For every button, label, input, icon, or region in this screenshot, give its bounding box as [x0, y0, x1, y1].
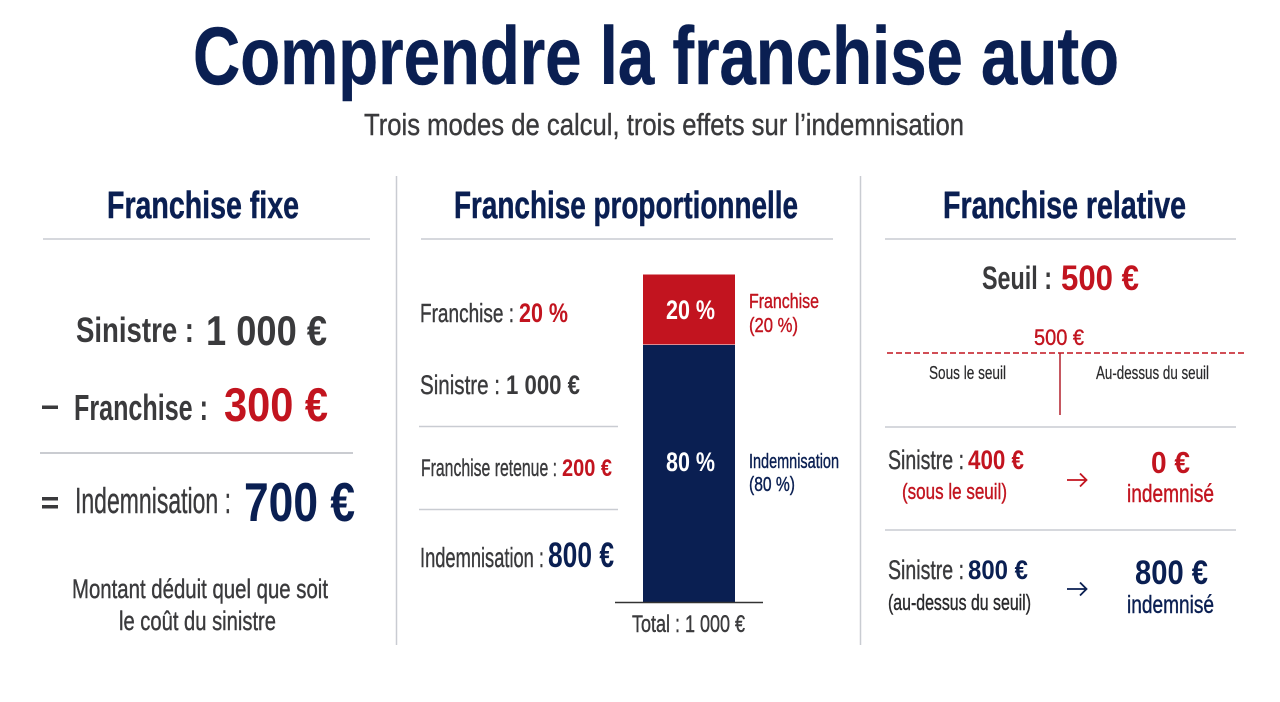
case: above threshold: (au-dessus du seuil) [888, 590, 1031, 615]
panel: franchise relative [885, 185, 1246, 619]
heading: franchise relative: Franchise relative [943, 185, 1186, 227]
panel: franchise fixe [40, 185, 370, 636]
left list: Indemnisation : [420, 542, 544, 573]
line: franchise: Franchise : [74, 387, 208, 428]
left list: Franchise retenue : [421, 455, 557, 482]
line: sinistre: Sinistre : [76, 311, 194, 350]
case: below threshold: 0 € [1151, 445, 1190, 480]
line: franchise: 300 € [224, 378, 328, 431]
threshold diagram: Sous le seuil [929, 363, 1006, 383]
legend: franchise [749, 291, 819, 337]
line: franchise [42, 378, 328, 431]
heading: franchise proportionnelle: Franchise proportionnelle [454, 185, 798, 227]
threshold diagram: 500 € [1034, 325, 1084, 350]
left list: Franchise : [420, 298, 514, 328]
line: indemnisation: Indemnisation : [75, 480, 231, 521]
case: below threshold [888, 445, 1214, 508]
stacked bar chart: 80 % [666, 447, 715, 477]
case: below threshold: indemnisé [1127, 480, 1214, 508]
legend: indemnisation [749, 451, 839, 496]
threshold label [982, 259, 1139, 298]
arrow: above threshold [1067, 582, 1086, 596]
note: Montant déduit quel que soit [72, 574, 328, 604]
left list: 1 000 € [506, 370, 580, 400]
case: above threshold: 800 € [968, 555, 1028, 585]
case: above threshold [888, 554, 1214, 619]
legend: franchise: (20 %) [749, 315, 798, 337]
left list: 200 € [562, 455, 612, 482]
left list: 800 € [548, 536, 614, 575]
legend: franchise: Franchise [749, 291, 819, 313]
arrow: below threshold [1067, 474, 1086, 486]
threshold label: 500 € [1061, 259, 1139, 298]
threshold diagram: Au-dessus du seuil [1096, 363, 1209, 383]
heading: franchise fixe: Franchise fixe [107, 185, 299, 227]
stacked bar chart: 20 % [666, 295, 715, 325]
case: above threshold: 800 € [1135, 554, 1208, 592]
stacked bar chart: Total : 1 000 € [632, 611, 745, 638]
case: above threshold: Sinistre : [888, 555, 964, 585]
line: indemnisation: 700 € [244, 471, 355, 533]
threshold label: Seuil : [982, 260, 1052, 296]
legend: indemnisation: Indemnisation [749, 451, 839, 473]
left list [419, 298, 618, 575]
subtitle: Trois modes de calcul, trois effets sur l’indemnisation [364, 107, 964, 142]
case: below threshold: 400 € [968, 445, 1024, 475]
line: indemnisation [42, 471, 355, 533]
case: below threshold: (sous le seuil) [902, 479, 1007, 504]
line: sinistre [76, 307, 327, 354]
stacked bar chart [615, 274, 763, 638]
threshold diagram [887, 325, 1246, 415]
case: below threshold: Sinistre : [888, 445, 964, 475]
left list: 20 % [519, 298, 568, 328]
panel: franchise proportionnelle [419, 185, 839, 638]
note: le coût du sinistre [119, 606, 276, 636]
note [72, 574, 328, 636]
case: above threshold: indemnisé [1127, 591, 1214, 619]
left list: Sinistre : [420, 370, 500, 400]
line: sinistre: 1 000 € [206, 307, 327, 354]
legend: indemnisation: (80 %) [749, 474, 795, 496]
